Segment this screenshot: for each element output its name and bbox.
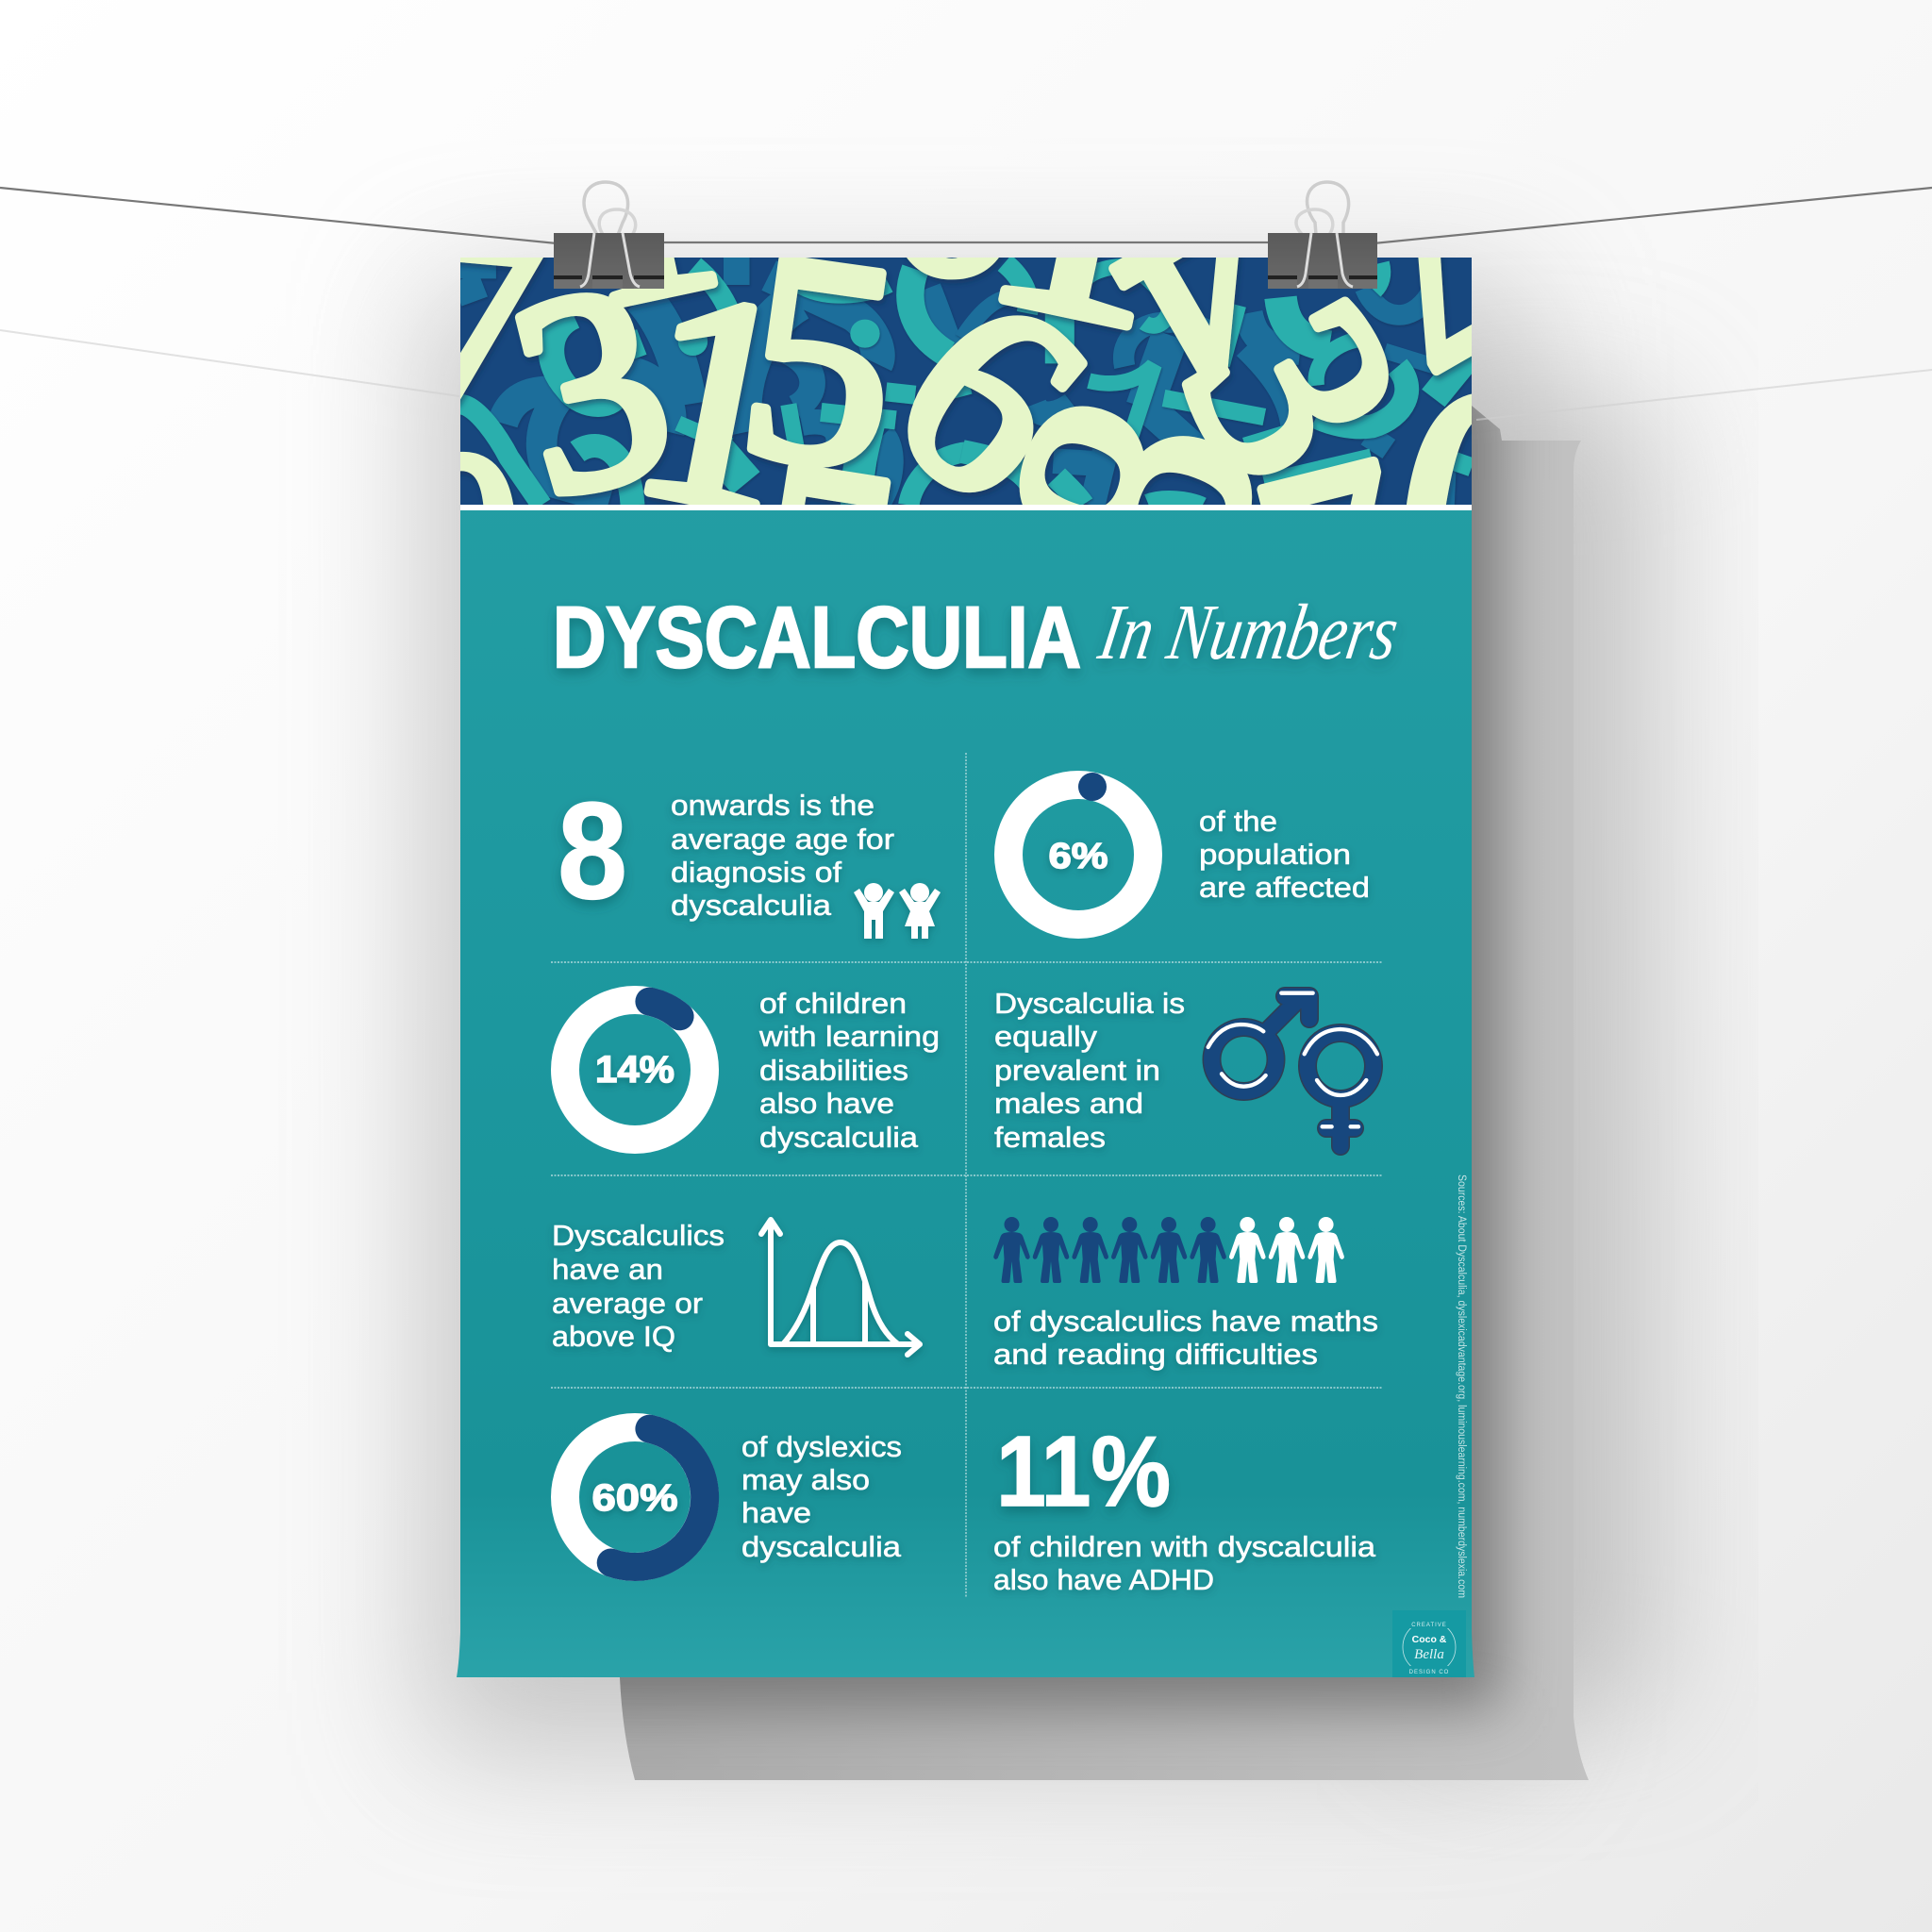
text: maths and reading [993,1305,1378,1371]
teal ribbons left [460,266,970,505]
icon: children [854,883,941,939]
text: learning disabilities [758,987,940,1154]
pale foreground numerals: 4 [1059,111,1338,454]
text: learning disabilities: with learning [758,1020,940,1053]
soft ambient poster shadow [425,283,1660,1755]
logo badge [1392,1610,1466,1677]
text: average age: diagnosis of [671,856,841,889]
stat: 14% donut: 14% [595,1049,675,1091]
title: In Numbers [1092,590,1405,676]
donut 60% [565,1427,705,1567]
text: learning disabilities: also have [759,1087,894,1120]
stat: 6% donut: 6% [1049,837,1108,876]
chart: bell curve [761,1220,920,1355]
pale foreground numerals: 0 [406,406,519,657]
text: IQ: have an [552,1253,663,1286]
stat: average IQ [552,1219,920,1355]
pale foreground numerals: 1 [610,224,823,580]
donut 6% [1008,785,1148,924]
hanging wire [0,188,1932,243]
text: equally prevalent [994,987,1185,1154]
pale foreground numerals: 3 [1124,251,1466,526]
pale foreground numerals: 7 [1228,395,1441,733]
faint string shadows [0,330,1932,420]
text: equally prevalent: females [994,1121,1106,1154]
grid dividers [551,753,1382,1598]
logo badge: Coco & [1412,1634,1447,1645]
text: equally prevalent: prevalent in [994,1054,1160,1087]
text: average age: average age for [671,823,894,856]
number 11%: 11% [996,1416,1171,1527]
pale foreground numerals: 7 [406,178,552,459]
text: dyslexics: of dyslexics [741,1430,902,1463]
text: population [1199,805,1370,904]
text: IQ [552,1219,724,1353]
stat: 11% ADHD [993,1416,1376,1596]
text: population: are affected [1199,871,1370,904]
text: ADHD: also have ADHD [993,1563,1214,1596]
pale foreground numerals: 0 [1371,313,1591,691]
title: DYSCALCULIA [553,590,1081,686]
stat: age 8 [558,774,941,939]
text: equally prevalent: Dyscalculia is [994,987,1185,1020]
text: learning disabilities: disabilities [759,1054,908,1087]
pale foreground numerals: 8 [932,353,1332,633]
text: maths and reading: of dyscalculics have maths [993,1305,1378,1338]
text: maths and reading: and reading difficulties [993,1338,1318,1371]
poster [457,258,1474,1677]
stat: 60% donut: 60% [592,1477,677,1519]
logo badge: Bella [1414,1647,1444,1662]
text: IQ: above IQ [552,1320,675,1353]
stat: people [993,1217,1378,1371]
pale foreground numerals: 5 [724,188,917,534]
text: learning disabilities: of children [759,987,907,1020]
text: average age [671,789,894,922]
pale foreground numerals: 5 [732,399,921,730]
blue ribbons right [962,288,1450,505]
icon: left binder clip [554,182,664,289]
banner: scattered numerals [460,258,1472,505]
stat: 14% donut [565,987,940,1154]
sources note: Sources: About Dyscalculia, dyslexicadvantage.org, luminouslearning.com, numberdyslexia.com [1456,1174,1467,1598]
donut 14% [565,1000,705,1140]
text: ADHD: of children with dyscalculia [993,1530,1376,1563]
pale foreground numerals: 3 [485,220,697,558]
teal ribbons right [962,263,1472,505]
text: learning disabilities: dyscalculia [759,1121,919,1154]
number 8: 8 [558,774,627,927]
text: dyslexics: may also [741,1463,870,1496]
pictogram: 6 of 9 people [993,1217,1344,1283]
pale foreground numerals: 1 [539,33,742,369]
banner white strip [460,505,1472,510]
stat: males and females [994,987,1377,1154]
blue ribbons left [458,257,954,505]
text: dyslexics: have [741,1496,811,1529]
pale foreground numerals: 0 [882,20,1024,333]
text: IQ: average or [552,1287,703,1320]
text: equally prevalent: males and [994,1087,1143,1120]
text: average age: dyscalculia [671,889,832,922]
text: dyslexics [741,1430,902,1563]
text: population: population [1199,838,1351,871]
text: equally prevalent: equally [994,1020,1098,1053]
text: population: of the [1199,805,1277,838]
logo badge: CREATIVE [1411,1623,1447,1628]
pale foreground numerals: 7 [1332,146,1556,420]
pale foreground numerals: 6 [841,237,1140,557]
poster cast shadow [620,406,1589,1780]
stat: 60% donut [565,1427,902,1567]
poster sheet [457,258,1474,1677]
text: ADHD [993,1530,1376,1596]
pale foreground numerals [460,258,1472,505]
text: dyslexics: dyscalculia [741,1530,902,1563]
text: IQ: Dyscalculics [552,1219,724,1252]
icon: right binder clip [1268,182,1377,289]
text: average age: onwards is the [671,789,874,822]
icon: gender symbols [1208,993,1377,1146]
logo badge: DESIGN CO [1409,1670,1449,1675]
stat: 6% donut [1008,773,1370,924]
